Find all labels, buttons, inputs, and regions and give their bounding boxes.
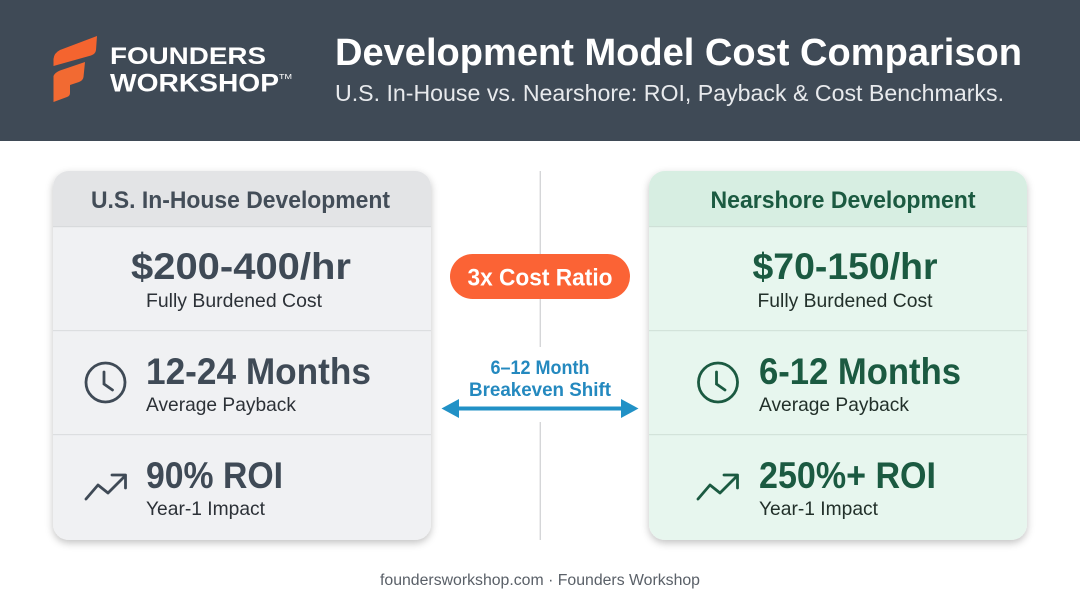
metric: hourly cost [131,246,351,312]
callout: 3x cost ratio: 3x Cost Ratio [468,264,612,292]
icon: clock [86,363,125,402]
icon: clock [698,363,738,402]
logo wordmark [110,43,292,98]
callout: breakeven shift label: Breakeven Shift [469,379,611,401]
metric: ROI: Year-1 Impact [759,498,879,520]
metric: ROI [146,455,283,520]
panel: nearshore development [649,171,1027,540]
logo wordmark: WORKSHOP [110,70,279,98]
metric: payback: 6-12 Months [759,351,961,392]
icon: trend arrow [698,475,738,499]
callout: breakeven shift label [469,357,611,401]
metric: ROI: 250%+ ROI [759,455,936,496]
metric: payback: 12-24 Months [146,351,371,392]
header band [0,0,1080,141]
metric: payback: Average Payback [146,394,296,416]
metric: ROI: Year-1 Impact [146,498,266,520]
metric: ROI: 90% ROI [146,455,283,496]
panel heading: Nearshore Development [710,187,976,214]
metric: hourly cost: Fully Burdened Cost [146,290,323,312]
metric: payback: Average Payback [759,394,909,416]
icon: trend arrow [86,475,126,499]
callout: breakeven shift label: 6–12 Month [490,357,590,379]
metric: payback [146,351,371,416]
metric: hourly cost: $70-150/hr [752,246,938,287]
metric: hourly cost [752,246,938,312]
metric: payback [759,351,961,416]
subtitle: U.S. In-House vs. Nearshore: ROI, Payback & Cost Benchmarks. [335,80,1004,106]
metric: ROI [759,455,936,520]
footer: foundersworkshop.com · Founders Workshop [380,572,700,589]
arrow: double-headed breakeven arrow [442,399,638,418]
panel heading: U.S. In-House Development [91,187,390,214]
icon: Founders Workshop logo mark [54,36,97,102]
logo wordmark: TM [279,72,292,81]
center divider [540,171,541,540]
metric: hourly cost: $200-400/hr [131,246,351,287]
title: Development Model Cost Comparison [335,32,1022,74]
logo wordmark: FOUNDERS [110,43,266,70]
panel: U.S. in-house development [53,171,431,540]
metric: hourly cost: Fully Burdened Cost [758,290,933,312]
callout: 3x cost ratio [450,254,630,299]
